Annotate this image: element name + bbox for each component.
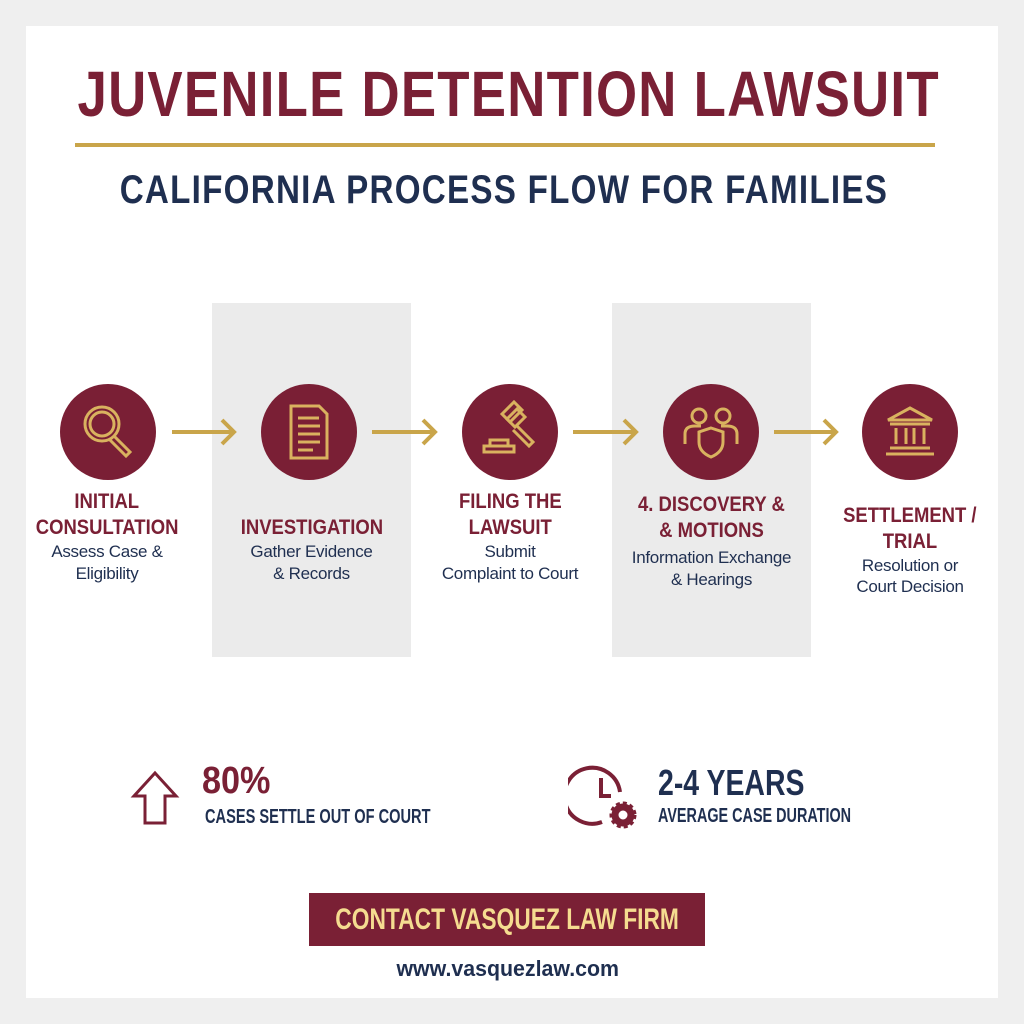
CTA button [309, 893, 705, 946]
icon: courthouse [862, 384, 958, 480]
icon: clock gear [568, 766, 636, 828]
step 4 text: & Hearings [671, 570, 752, 589]
subtitle: CALIFORNIA PROCESS FLOW FOR FAMILIES [120, 168, 888, 212]
step 1 text: CONSULTATION [36, 516, 178, 539]
gold divider [75, 143, 935, 147]
step 5 text: SETTLEMENT / [843, 504, 977, 527]
icon: document [261, 384, 357, 480]
step 2 text [240, 516, 383, 583]
step 5 text: Court Decision [856, 577, 964, 596]
icon: people shield [663, 384, 759, 480]
step 1 text: INITIAL [75, 490, 139, 513]
arrows between steps [172, 418, 839, 446]
step 3 text: Submit [484, 542, 536, 561]
step 4 text: Information Exchange [632, 548, 791, 567]
icon: gavel [462, 384, 558, 480]
panel: step 4 background [612, 303, 811, 657]
step 2 text: & Records [273, 564, 350, 583]
CTA text: CONTACT VASQUEZ LAW FIRM [335, 903, 679, 936]
icon: magnifier [60, 384, 156, 480]
stat: 2-4 years: AVERAGE CASE DURATION [658, 805, 851, 827]
step 1 text: Eligibility [76, 564, 138, 583]
step 2 text: Gather Evidence [250, 542, 373, 561]
panel: step 2 background [212, 303, 411, 657]
stat: 80%: 80% [202, 760, 270, 802]
stat: 80%: CASES SETTLE OUT OF COURT [205, 806, 431, 828]
website url: www.vasquezlaw.com [397, 956, 619, 981]
title: JUVENILE DETENTION LAWSUIT [77, 58, 940, 130]
step 4 text [632, 493, 791, 589]
stat: 2-4 years: 2-4 YEARS [658, 762, 804, 803]
stat: 80% [130, 760, 431, 828]
step 4 text: 4. DISCOVERY & [638, 493, 785, 516]
step 4 text: & MOTIONS [659, 519, 764, 542]
step 3 text [442, 490, 578, 583]
icon: up arrow [130, 770, 180, 824]
step 5 text: TRIAL [883, 530, 937, 553]
step 3 text: FILING THE [459, 490, 561, 513]
step 1 text: Assess Case & [51, 542, 163, 561]
step 3 text: LAWSUIT [468, 516, 552, 539]
step 5 text: Resolution or [862, 556, 958, 575]
step 3 text: Complaint to Court [442, 564, 578, 583]
step 2 text: INVESTIGATION [240, 516, 383, 539]
stat: 2-4 years [568, 762, 851, 828]
step 5 text [843, 504, 977, 596]
step 1 text [36, 490, 178, 583]
